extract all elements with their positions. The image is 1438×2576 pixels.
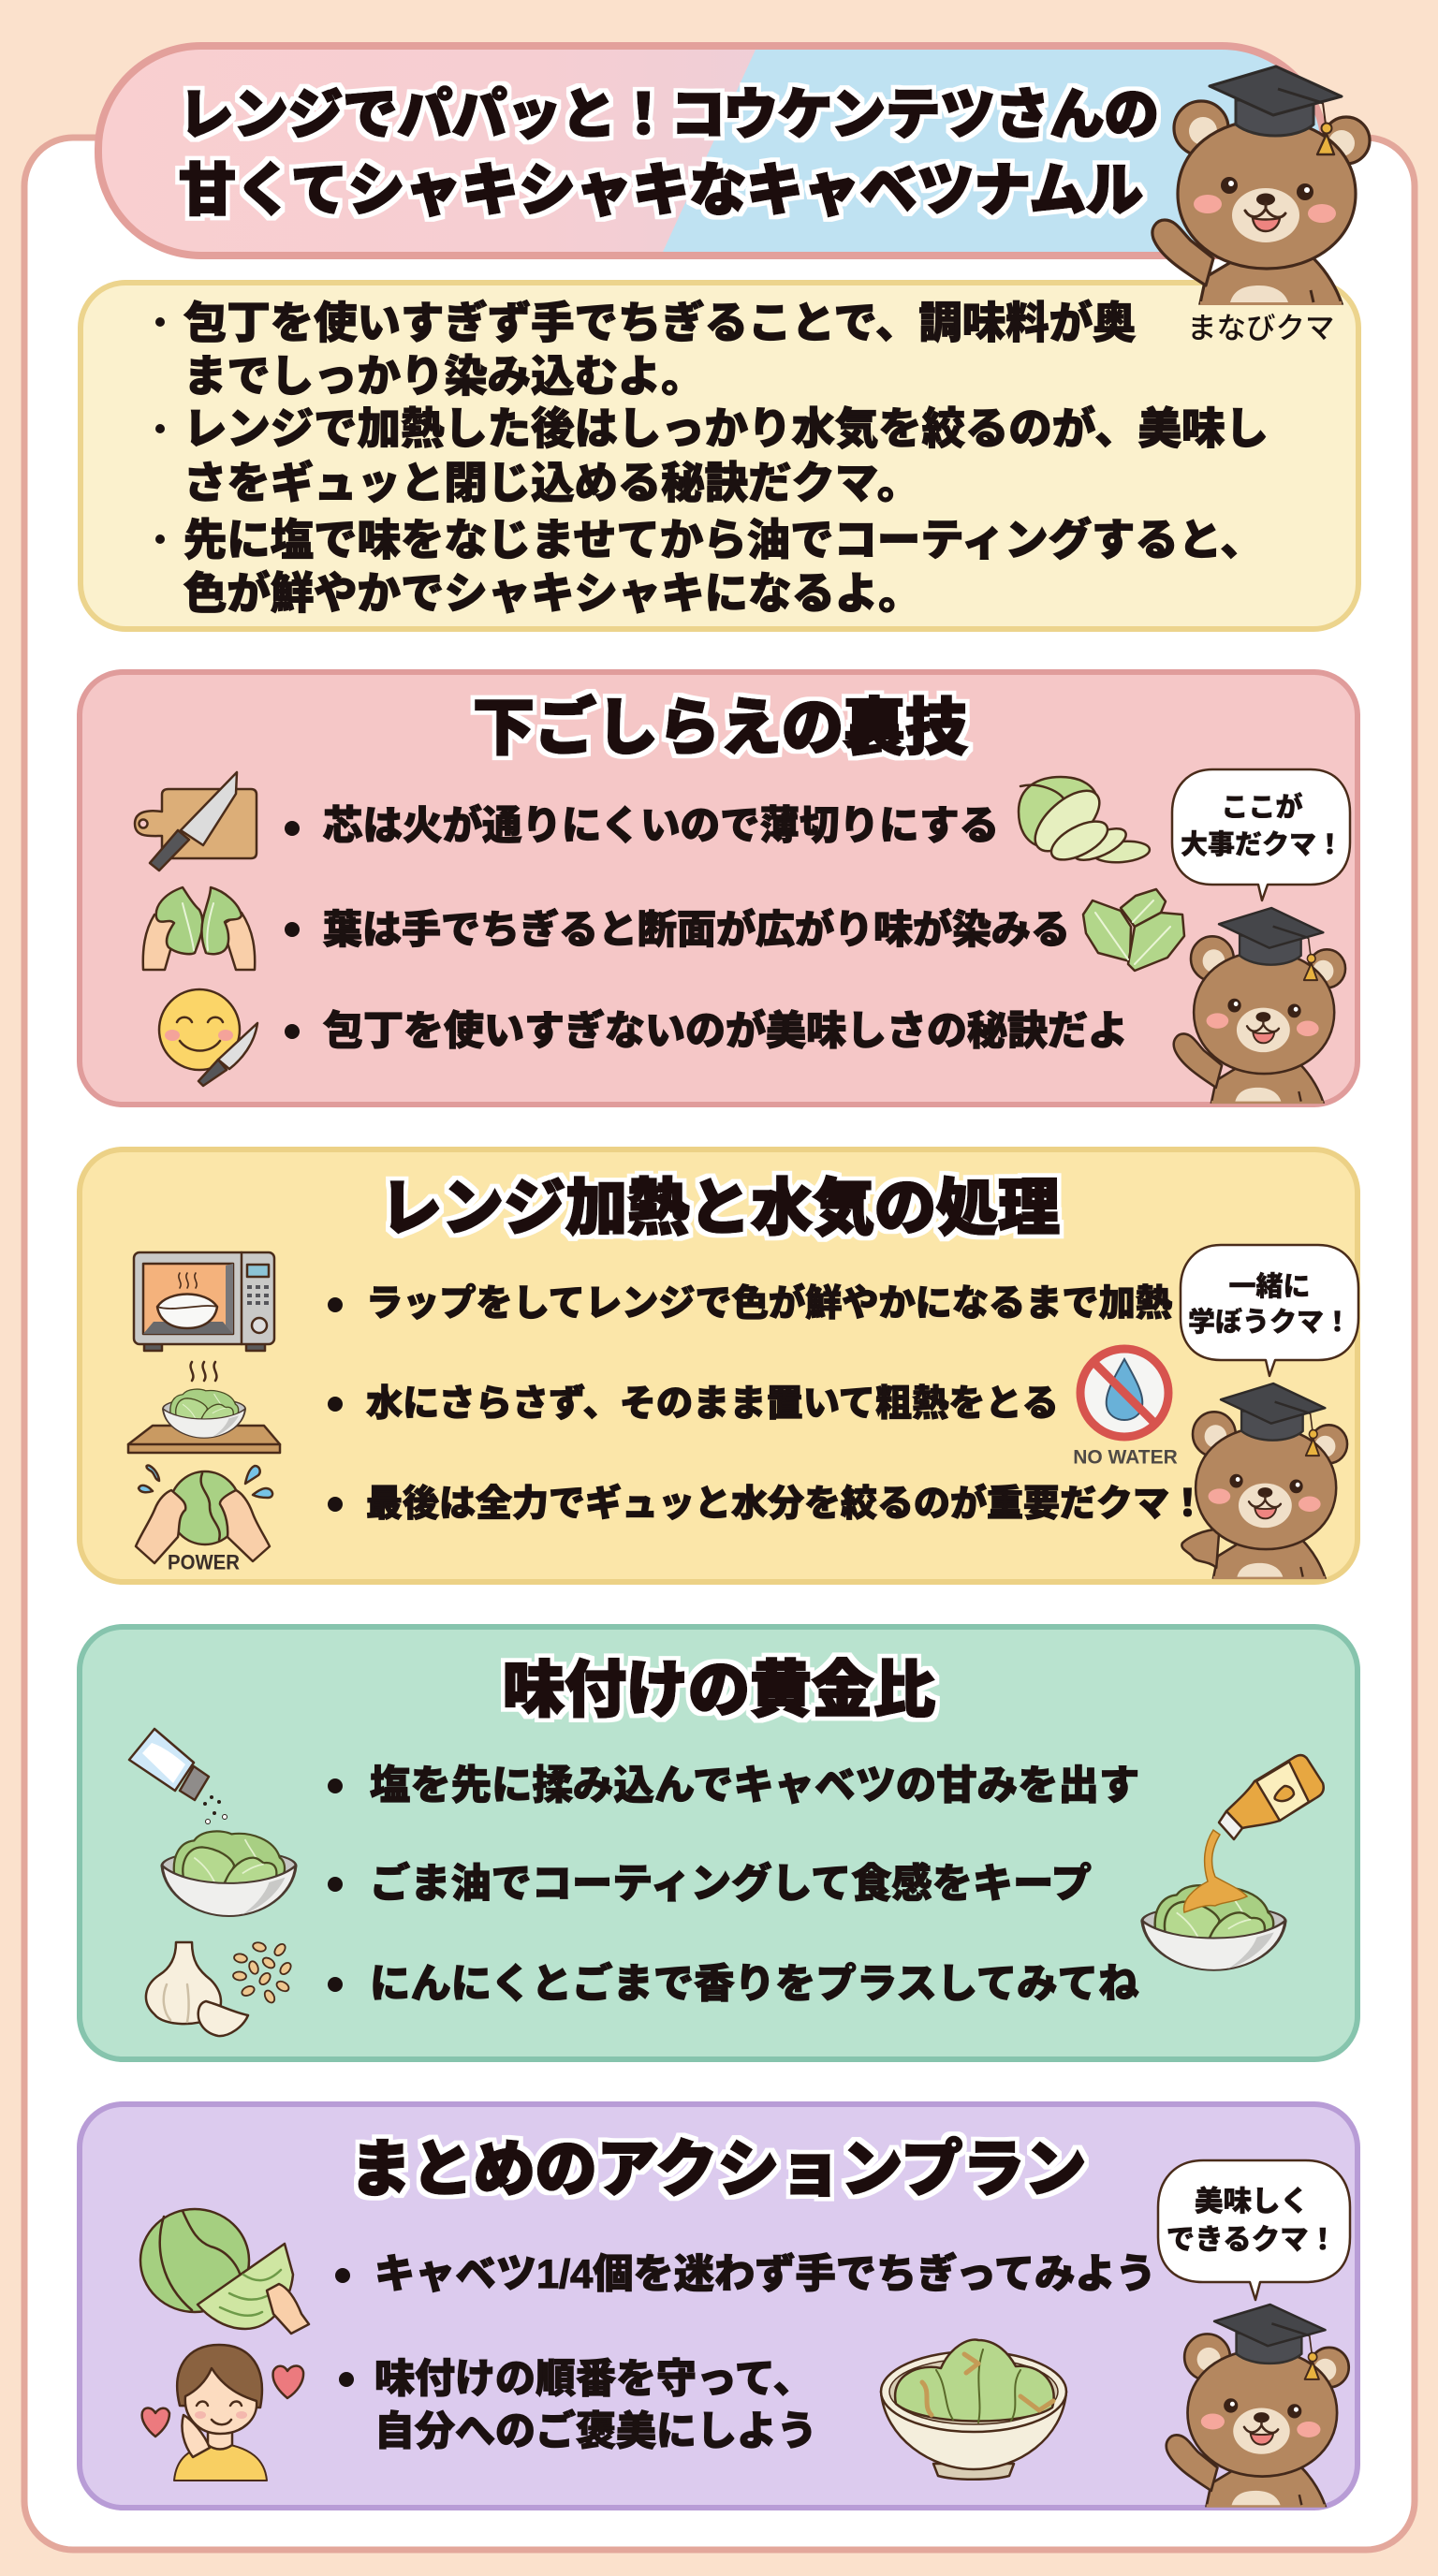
- icon: cooling bowl on board: [128, 1362, 280, 1453]
- speech bubble: [1181, 1245, 1358, 1376]
- label: POWER: POWER: [168, 1550, 240, 1574]
- tip text 2: レンジで加熱した後はしっかり水気を絞るのが、美味し: [183, 404, 1269, 453]
- row 1 text: 塩を先に揉み込んでキャベツの甘みを出す: [370, 1764, 1139, 1808]
- row 3 text: にんにくとごまで香りをプラスしてみてね: [370, 1961, 1139, 2007]
- row 2 text: 味付けの順番を守って、: [374, 2357, 814, 2402]
- speech bubble: [1158, 2160, 1350, 2300]
- row 3 text: 包丁を使いすぎないのが美味しさの秘訣だよ: [323, 1008, 1128, 1054]
- icon: smiling face with knife: [159, 989, 257, 1086]
- tip text 3: 色が鮮やかでシャキシャキになるよ。: [183, 569, 922, 618]
- speech bubble: [1172, 769, 1350, 900]
- mascot name label: まなびクマ: [1187, 311, 1335, 344]
- icon: sliced cabbage: [1019, 777, 1151, 868]
- speech bubble: 一緒に: [1228, 1271, 1311, 1302]
- icon: oil poured on cabbage: [1142, 1755, 1324, 1970]
- icon: finished namul bowl: [881, 2339, 1066, 2480]
- icon: happy person with hearts: [142, 2345, 303, 2481]
- title line 1: レンジでパパッと！コウケンテツさんの: [179, 84, 1159, 146]
- panel: intro tips: [81, 283, 1358, 629]
- panel: action plan: [80, 2104, 1357, 2508]
- tip text 2: さをギュッと閉じ込める秘訣だクマ。: [183, 459, 920, 507]
- icon: hands squeezing cabbage: [136, 1465, 272, 1574]
- icon: sesame seeds: [233, 1941, 293, 2004]
- speech bubble: 学ぼうクマ！: [1188, 1307, 1351, 1338]
- mascot bear: [1167, 2305, 1349, 2506]
- icon: garlic: [146, 1942, 248, 2036]
- icon: cabbage bowl: [162, 1831, 296, 1916]
- panel: microwave and water: [80, 1149, 1358, 1582]
- tip text 1: 包丁を使いすぎず手でちぎることで、調味料が奥: [183, 299, 1136, 347]
- speech bubble: できるクマ！: [1167, 2224, 1337, 2256]
- icon: leaves: [1083, 889, 1184, 971]
- mascot bear: [1174, 908, 1345, 1102]
- tip text 3: [155, 516, 1264, 618]
- panel: preparation: [80, 672, 1357, 1105]
- tip text 3: 先に塩で味をなじませてから油でコーティングすると、: [183, 516, 1264, 564]
- title line 2: 甘くてシャキシャキなキャベツナムル: [179, 158, 1143, 222]
- heading: まとめのアクションプラン: [350, 2134, 1086, 2203]
- tip text 2: [155, 404, 1269, 507]
- mascot: title bear: [1152, 66, 1370, 303]
- panel: seasoning: [80, 1627, 1357, 2059]
- row 3 text: 最後は全力でギュッと水分を絞るのが重要だクマ！: [366, 1483, 1206, 1524]
- mascot bear pointing: [1181, 1383, 1347, 1577]
- row 1 text: 芯は火が通りにくいので薄切りにする: [323, 803, 999, 848]
- row 2 text: [339, 2357, 817, 2454]
- row 1 text: キャベツ1/4個を迷わず手でちぎってみよう: [374, 2251, 1156, 2297]
- icon: cabbage and quarter wedge: [140, 2209, 309, 2334]
- speech bubble: 美味しく: [1195, 2186, 1309, 2217]
- icon: cutting board and knife: [135, 772, 257, 871]
- speech bubble: 大事だクマ！: [1181, 829, 1343, 860]
- icon: hands tearing leaf: [143, 887, 255, 970]
- tip text 1: [155, 299, 1136, 401]
- tip text 1: までしっかり染み込むよ。: [183, 352, 705, 401]
- speech bubble: ここが: [1221, 791, 1303, 823]
- row 2 text: 水にさらさず、そのまま置いて粗熱をとる: [366, 1383, 1059, 1425]
- label: NO WATER: NO WATER: [1073, 1447, 1178, 1468]
- row 2 text: 葉は手でちぎると断面が広がり味が染みる: [323, 908, 1070, 951]
- heading: レンジ加熱と水気の処理: [380, 1173, 1060, 1242]
- icon: salt shaker: [129, 1729, 227, 1823]
- row 1 text: ラップをしてレンジで色が鮮やかになるまで加熱: [366, 1282, 1172, 1324]
- row 2 text: 自分へのご褒美にしよう: [374, 2408, 817, 2454]
- icon: microwave: [134, 1252, 274, 1351]
- title banner: [98, 37, 1339, 262]
- heading: 味付けの黄金比: [503, 1655, 935, 1724]
- row 2 text: ごま油でコーティングして食感をキープ: [370, 1861, 1092, 1907]
- heading: 下ごしらえの裏技: [473, 693, 967, 762]
- icon: no water sign: [1073, 1349, 1178, 1468]
